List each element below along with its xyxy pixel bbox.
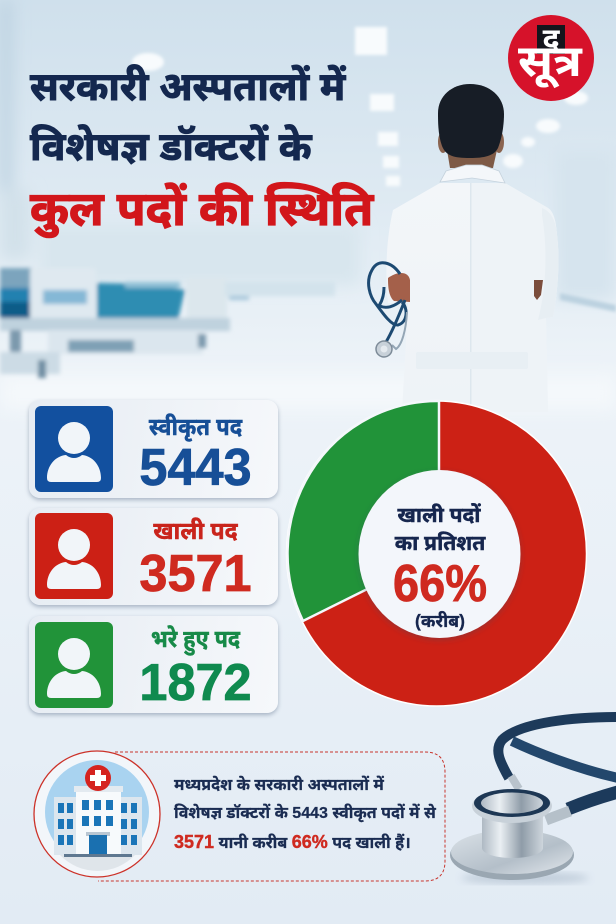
summary text: विशेषज्ञ डॉक्टरों के 5443 स्वीकृत पदों में से xyxy=(174,805,436,822)
centre text xyxy=(393,503,487,631)
logo black square: द xyxy=(543,23,559,56)
icon: person red xyxy=(35,513,113,599)
donut chart xyxy=(286,400,588,707)
label: भरे हुए पद xyxy=(151,626,240,653)
centre text: (करीब) xyxy=(415,611,465,631)
tubes xyxy=(498,717,616,820)
centre disc xyxy=(358,470,520,638)
title xyxy=(29,64,375,238)
neck xyxy=(447,150,497,168)
collar xyxy=(440,165,505,183)
title line 1: सरकारी अस्पतालों में xyxy=(30,66,345,109)
number: 1872 xyxy=(139,654,252,712)
door xyxy=(86,832,110,836)
ears xyxy=(438,131,448,153)
ceiling lights are decorative xyxy=(132,27,588,186)
windows xyxy=(58,800,137,845)
label: स्वीकृत पद xyxy=(149,414,242,441)
coat body xyxy=(386,183,558,412)
card: sanctioned posts xyxy=(29,400,278,498)
icon: hospital badge xyxy=(33,750,161,878)
slice: filled 34% xyxy=(288,401,439,621)
chest piece base xyxy=(450,830,574,880)
wings xyxy=(54,797,142,855)
title line 2: विशेषज्ञ डॉक्टरों के xyxy=(30,125,312,169)
number: 3571 xyxy=(139,545,252,603)
chest piece ring xyxy=(472,789,552,823)
card: vacant posts xyxy=(29,508,278,605)
beds in the corridor xyxy=(0,268,335,378)
icon: person green xyxy=(35,622,113,708)
summary text xyxy=(174,775,436,852)
centre text: खाली पदों xyxy=(398,503,481,527)
logo word: सूत्र xyxy=(518,37,582,86)
title line 3 highlighted: कुल पदों की स्थिति xyxy=(30,182,373,235)
dashed outline xyxy=(98,752,445,881)
doctor figure xyxy=(369,84,558,412)
waist belt xyxy=(416,352,528,369)
card: filled posts xyxy=(29,616,278,713)
red cross xyxy=(85,765,111,791)
hair xyxy=(438,84,504,158)
icon: stethoscope xyxy=(450,712,616,886)
central block xyxy=(76,790,121,855)
summary text: मध्यप्रदेश के सरकारी अस्पतालों में xyxy=(174,777,384,794)
number: 5443 xyxy=(139,439,252,497)
label: खाली पद xyxy=(153,518,238,545)
slice: vacant 66% xyxy=(286,401,586,706)
logo black square xyxy=(537,25,565,54)
shadow xyxy=(461,872,589,884)
callout: dashed summary box xyxy=(98,752,446,882)
logo: द सूत्र xyxy=(508,15,594,101)
hands xyxy=(388,273,410,302)
stethoscope held xyxy=(369,263,407,349)
centre text: 66% xyxy=(393,555,487,613)
icon: person blue xyxy=(35,406,113,492)
centre text: का प्रतिशत xyxy=(395,531,486,555)
summary text: 3571 यानी करीब 66% पद खाली हैं। xyxy=(174,832,411,852)
chest piece stem xyxy=(482,808,543,848)
